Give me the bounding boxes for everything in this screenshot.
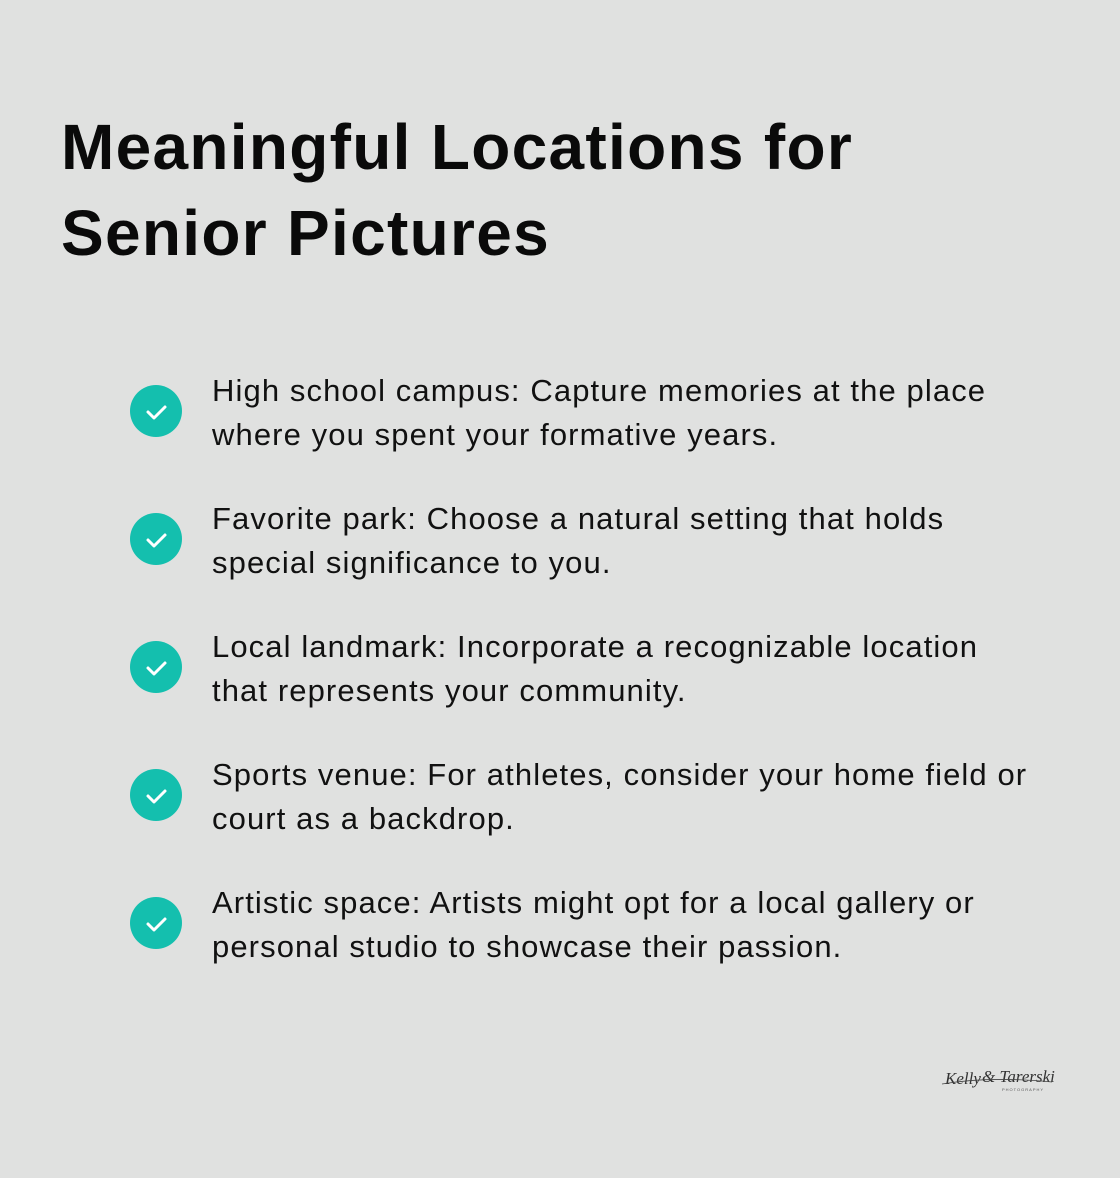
text: court as a backdrop.	[212, 801, 515, 836]
text: where you spent your formative years.	[212, 417, 778, 452]
text: special significance to you.	[212, 545, 612, 580]
title: Meaningful Locations for	[61, 111, 853, 183]
text: Artistic space: Artists might opt for a local gallery or	[212, 885, 975, 920]
icon: check	[130, 513, 182, 565]
text	[212, 885, 975, 964]
text: Favorite park: Choose a natural setting that holds	[212, 501, 944, 536]
text	[212, 373, 986, 452]
text	[212, 757, 1027, 836]
logo: PHOTOGRAPHY	[1002, 1087, 1044, 1092]
item: local landmark	[130, 629, 978, 708]
icon: check	[130, 897, 182, 949]
icon: check	[130, 769, 182, 821]
icon: check	[130, 385, 182, 437]
text: High school campus: Capture memories at the place	[212, 373, 986, 408]
logo: & Tarerski	[982, 1067, 1055, 1086]
item: artistic space	[130, 885, 975, 964]
item: high school campus	[130, 373, 986, 452]
title: Senior Pictures	[61, 197, 550, 269]
logo	[942, 1067, 1055, 1092]
text: Sports venue: For athletes, consider your home field or	[212, 757, 1027, 792]
logo: Kelly	[944, 1069, 981, 1088]
item: favorite park	[130, 501, 944, 580]
text: personal studio to showcase their passion.	[212, 929, 842, 964]
text: Local landmark: Incorporate a recognizable location	[212, 629, 978, 664]
text	[212, 629, 978, 708]
item: sports venue	[130, 757, 1027, 836]
text: that represents your community.	[212, 673, 687, 708]
icon: check	[130, 641, 182, 693]
text	[212, 501, 944, 580]
title	[61, 111, 853, 269]
